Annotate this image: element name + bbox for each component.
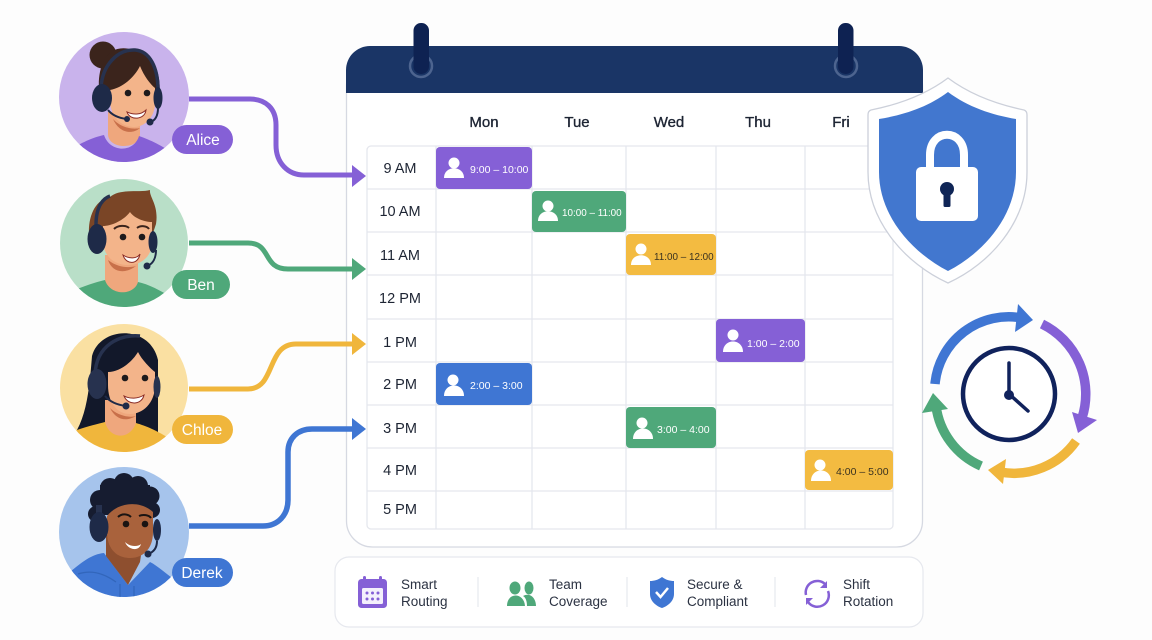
feature: Smart Routing — [358, 576, 448, 609]
rotation arrow: green — [922, 393, 981, 466]
shift: Wed 11:00 - 12:00 — [626, 234, 716, 275]
binding ring right — [835, 23, 857, 77]
feature: Shift Rotation — [806, 577, 893, 609]
calendar body — [346, 60, 922, 547]
feature: Secure and Compliant: Compliant — [687, 594, 748, 609]
avatar: Alice — [59, 32, 233, 170]
name tag: Chloe: Chloe — [182, 422, 222, 439]
feature: Team Coverage — [507, 577, 608, 609]
binding ring left — [410, 23, 432, 77]
shift: Fri 4:00 - 5:00 — [805, 450, 893, 490]
time labels: 4 PM — [383, 463, 417, 479]
weekday headings: Wed — [654, 114, 684, 131]
time labels: 10 AM — [379, 204, 421, 220]
calendar header bar — [346, 46, 923, 93]
weekday headings: Fri — [832, 114, 850, 131]
name tag: Ben — [172, 270, 230, 299]
feature: Smart Routing: Smart — [401, 577, 437, 592]
shift: Fri 4:00 - 5:00: 4:00 – 5:00 — [836, 466, 889, 478]
avatar: Ben — [60, 179, 230, 315]
shift: Thu 1:00 - 2:00 — [716, 319, 805, 362]
name tag: Alice: Alice — [186, 132, 220, 149]
icon: shift rotation clock — [922, 304, 1097, 484]
time labels — [379, 161, 421, 518]
time labels: 12 PM — [379, 291, 421, 307]
name tag: Chloe — [172, 415, 233, 444]
panel: feature legend — [335, 557, 923, 627]
shift: Wed 3:00 - 4:00 — [626, 407, 716, 448]
connector: Derek to 3 PM — [189, 418, 366, 526]
avatar: Chloe — [60, 324, 233, 455]
clock face — [963, 348, 1055, 440]
avatar: Derek — [59, 467, 233, 600]
time labels: 2 PM — [383, 377, 417, 393]
feature: Secure and Compliant: Secure & — [687, 577, 743, 592]
weekday headings: Thu — [745, 114, 771, 131]
rotation arrow: purple — [1042, 324, 1097, 433]
connector: Alice to 9 AM — [189, 99, 366, 187]
shift: Thu 1:00 - 2:00: 1:00 – 2:00 — [747, 338, 800, 350]
shift: Mon 2:00 - 3:00: 2:00 – 3:00 — [470, 380, 523, 392]
shift: Wed 3:00 - 4:00: 3:00 – 4:00 — [657, 424, 710, 436]
rotation arrow: blue — [935, 304, 1033, 384]
feature: Shift Rotation: Shift — [843, 577, 870, 592]
icon: security shield with padlock — [868, 78, 1027, 283]
name tag: Ben: Ben — [187, 277, 215, 294]
feature: Shift Rotation: Rotation — [843, 594, 893, 609]
name tag: Derek — [172, 558, 233, 587]
time labels: 3 PM — [383, 421, 417, 437]
name tag: Alice — [172, 125, 233, 154]
feature: Team Coverage: Coverage — [549, 594, 608, 609]
shift: Tue 10:00 - 11:00: 10:00 – 11:00 — [562, 208, 622, 219]
schedule grid — [367, 146, 893, 529]
weekday headings: Tue — [564, 114, 590, 131]
shift: Mon 2:00 - 3:00 — [436, 363, 532, 405]
weekday headings: Mon — [469, 114, 499, 131]
time labels: 9 AM — [383, 161, 417, 177]
rotation arrow: yellow — [988, 441, 1076, 484]
feature: Team Coverage: Team — [549, 577, 582, 592]
shift: Mon 9:00 - 10:00: 9:00 – 10:00 — [470, 164, 529, 176]
shift: Mon 9:00 - 10:00 — [436, 147, 532, 189]
name tag: Derek: Derek — [181, 565, 223, 582]
connector: Chloe to 1 PM — [189, 333, 366, 389]
connector: Ben to 11 AM — [189, 243, 366, 280]
panel: calendar — [346, 23, 923, 547]
feature: Smart Routing: Routing — [401, 594, 448, 609]
weekday headings — [469, 114, 850, 131]
shift: Tue 10:00 - 11:00 — [532, 191, 626, 232]
feature: Secure and Compliant — [650, 577, 748, 609]
shift: Wed 11:00 - 12:00: 11:00 – 12:00 — [654, 252, 714, 263]
time labels: 1 PM — [383, 335, 417, 351]
time labels: 11 AM — [380, 248, 420, 264]
time labels: 5 PM — [383, 502, 417, 518]
